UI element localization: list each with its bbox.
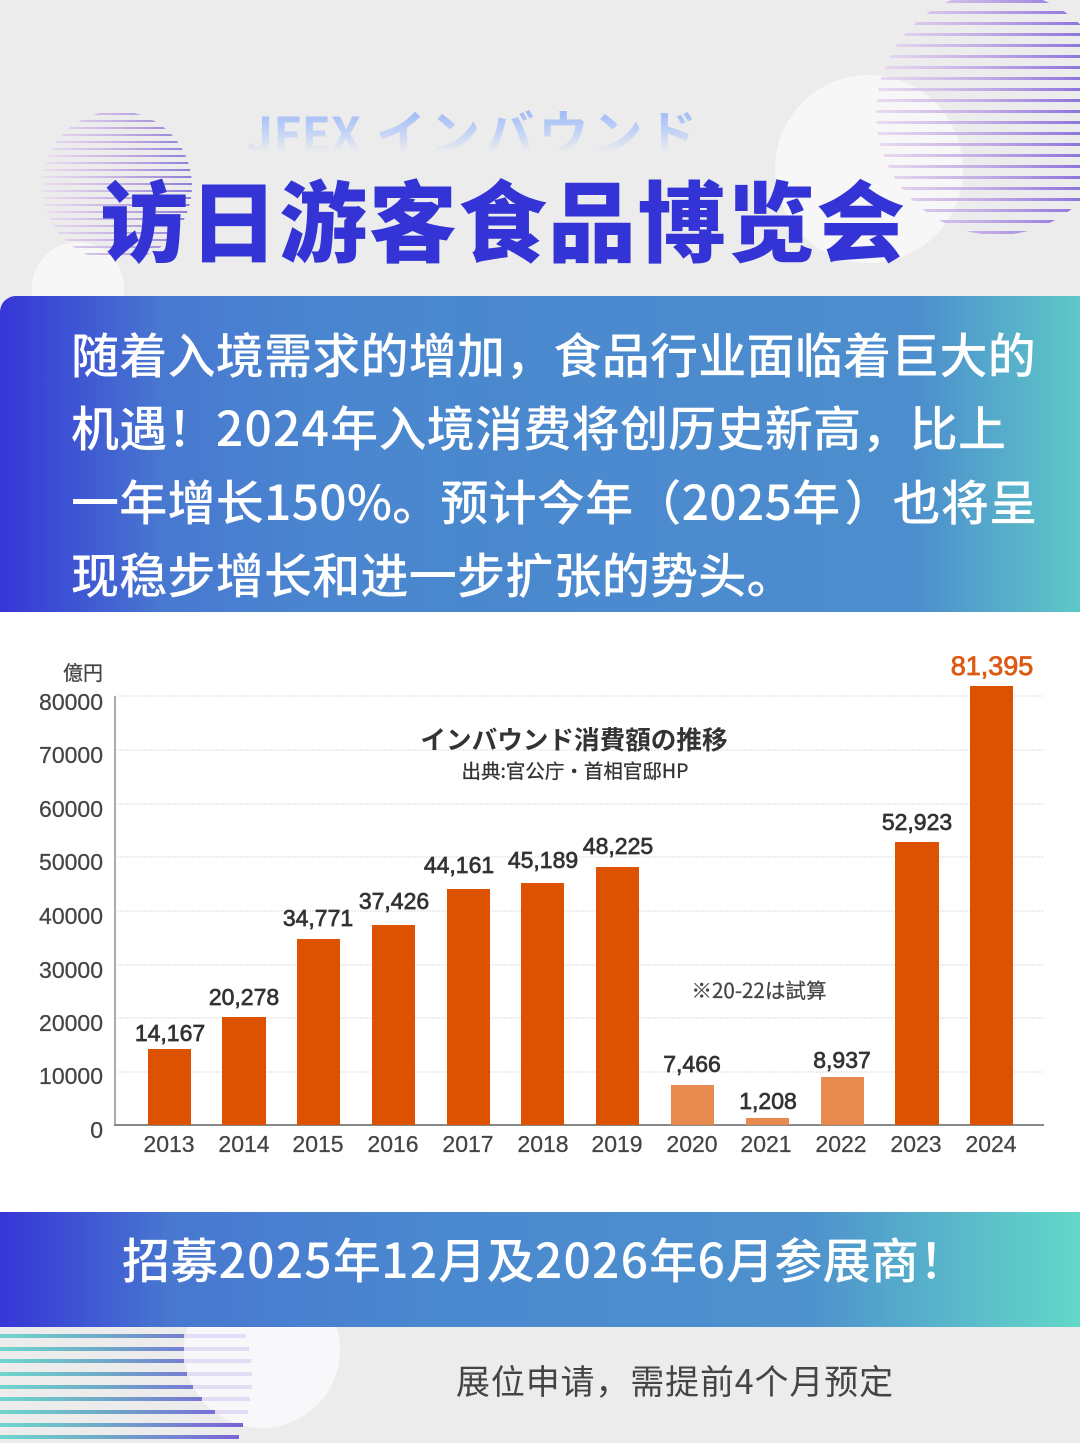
y axis labels: 億円 [63,657,103,686]
year labels: 2014 [218,1131,270,1157]
y axis [114,696,1044,1126]
value labels: 8,937 [813,1047,871,1073]
year labels: 2017 [442,1131,494,1157]
y axis labels: 50000 [39,849,103,875]
panel: chart [0,612,1080,1212]
intro text line 3: 一年增长150%。预计今年（2025年）也将呈 [71,464,1037,534]
value labels [135,651,1033,1114]
panel: intro [0,296,1080,612]
y axis labels: 10000 [39,1063,103,1089]
year labels: 2024 [965,1131,1017,1157]
value labels: 1,208 [739,1088,797,1114]
value labels: 37,426 [359,888,429,914]
value labels: 52,923 [882,809,952,835]
y axis labels: 60000 [39,796,103,822]
value labels: 14,167 [135,1020,205,1046]
year labels: 2023 [890,1131,942,1157]
chart note: ※20-22は試算 [691,974,827,1004]
y axis labels: 80000 [39,689,103,715]
year labels: 2018 [517,1131,569,1157]
intro text line 2: 机遇！2024年入境消费将创历史新高，比上 [71,390,1006,460]
y axis labels: 40000 [39,903,103,929]
title: 访日游客食品博览会 [100,154,906,281]
year labels: 2016 [367,1131,419,1157]
value labels: 20,278 [209,984,279,1010]
year labels: 2013 [143,1131,195,1157]
year labels [143,1131,1017,1157]
value labels: 44,161 [424,852,494,878]
y axis labels: 70000 [39,742,103,768]
banner: recruiting exhibitors [0,1212,1080,1327]
value labels: 48,225 [583,833,653,859]
intro text line 1: 随着入境需求的增加，食品行业面临着巨大的 [71,317,1036,387]
y axis labels [39,657,103,1143]
year labels: 2020 [666,1131,718,1157]
value labels: 81,395 [951,651,1033,681]
bars [148,686,1013,1125]
year labels: 2015 [292,1131,344,1157]
year labels: 2019 [591,1131,643,1157]
y axis labels: 30000 [39,957,103,983]
year labels: 2021 [740,1131,792,1157]
chart source: 出典:官公庁・首相官邸HP [462,755,688,784]
chart title: インバウンド消費額の推移 [420,720,728,757]
y axis labels: 0 [90,1117,103,1143]
value labels: 34,771 [283,905,353,931]
y axis labels: 20000 [39,1010,103,1036]
banner text: 招募2025年12月及2026年6月参展商！ [122,1222,968,1292]
intro text line 4: 现稳步增长和进一步扩张的势头。 [71,537,795,607]
year labels: 2022 [815,1131,867,1157]
value labels: 45,189 [508,847,578,873]
value labels: 7,466 [663,1051,721,1077]
booth note: 展位申请，需提前4个月预定 [456,1355,894,1404]
